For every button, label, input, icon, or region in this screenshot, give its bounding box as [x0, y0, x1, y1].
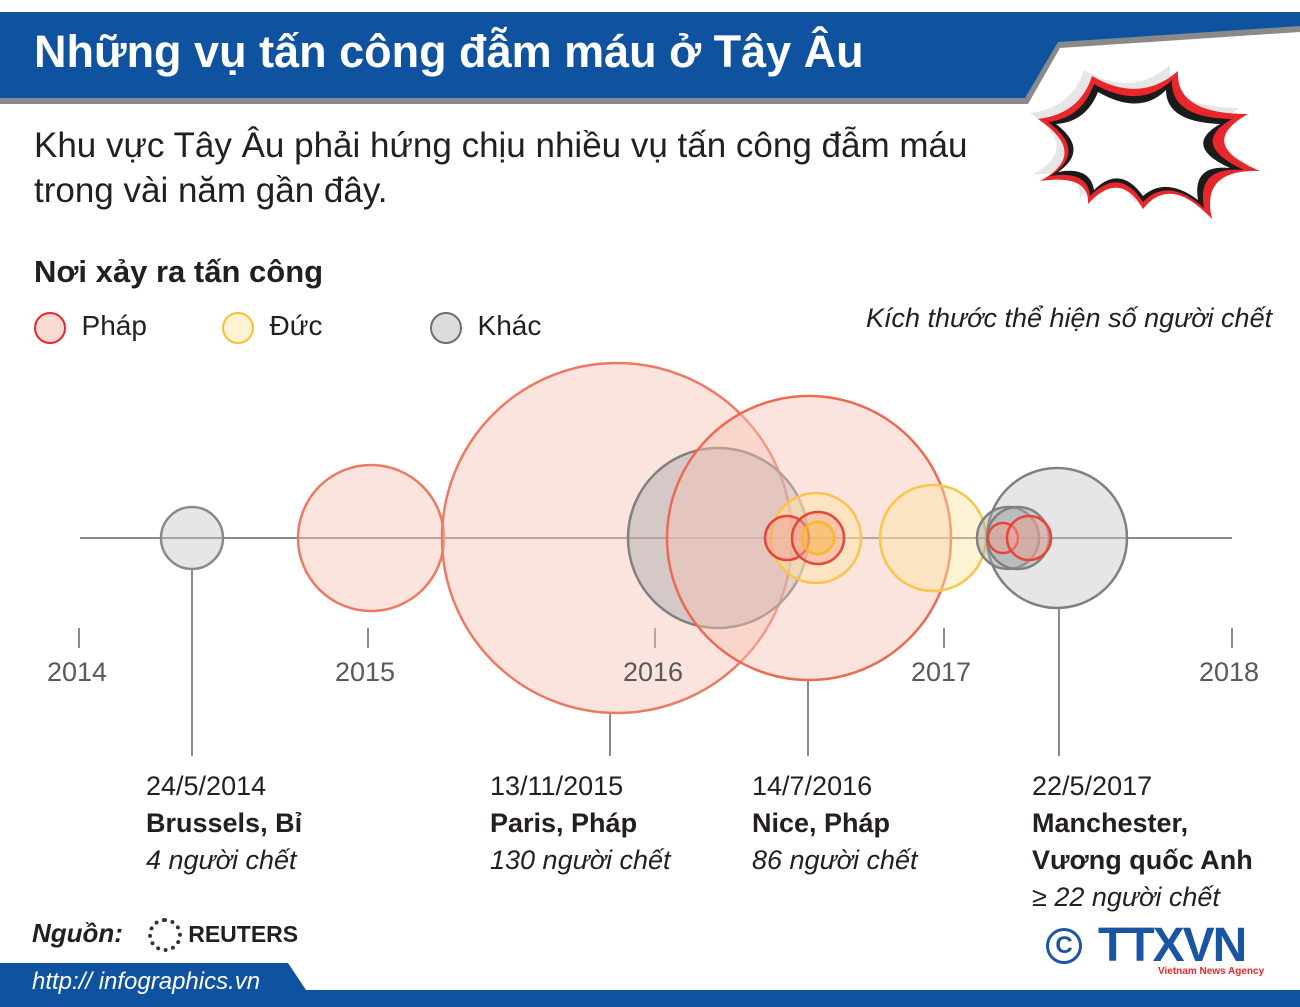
event: Nice: Nice, Pháp [752, 808, 890, 838]
subtitle text [34, 126, 967, 210]
event: Brussels: Brussels, Bỉ [146, 808, 302, 838]
section heading: Nơi xảy ra tấn công [34, 254, 323, 289]
event: Manchester: 22/5/2017 [1032, 771, 1152, 801]
logo: TTXVN: TTXVN [1098, 919, 1245, 972]
footer url: http:// infographics.vn [32, 968, 260, 995]
title: Những vụ tấn công đẫm máu ở Tây Âu [34, 26, 864, 77]
event: Brussels: 4 người chết [146, 845, 297, 875]
bubble timeline chart: 2015 [335, 657, 395, 687]
logo: TTXVN: C [1055, 932, 1073, 959]
event: Nice [752, 771, 918, 875]
event: Manchester [1032, 771, 1253, 912]
event: Paris: 13/11/2015 [490, 771, 623, 801]
event: Brussels: 24/5/2014 [146, 771, 266, 801]
legend: Đức [222, 310, 323, 344]
subtitle text: trong vài năm gần đây. [34, 171, 387, 210]
icon: explosion [1030, 65, 1260, 219]
event: Nice: 14/7/2016 [752, 771, 872, 801]
subtitle text: Khu vực Tây Âu phải hứng chịu nhiều vụ tấn công đẫm máu [34, 126, 967, 165]
legend: Pháp: Pháp [82, 310, 147, 341]
legend: Khác: Khác [478, 310, 541, 341]
source: Nguồn: REUTERS [32, 918, 298, 948]
logo: TTXVN [1046, 919, 1264, 977]
header banner [0, 12, 1300, 104]
legend [34, 310, 541, 344]
bubble timeline chart: 2017 [911, 657, 971, 687]
event: Paris: Paris, Pháp [490, 808, 637, 838]
event: Brussels [146, 771, 302, 875]
event: Manchester: ≥ 22 người chết [1032, 882, 1220, 912]
legend: Khác [430, 310, 541, 344]
bubble timeline chart: 2014 [47, 657, 107, 687]
event: Manchester: Manchester, [1032, 808, 1188, 838]
bubble timeline chart: 2018 [1199, 657, 1259, 687]
footer bar [0, 963, 1300, 1007]
event: Manchester: Vương quốc Anh [1032, 845, 1253, 875]
logo: TTXVN: Vietnam News Agency [1158, 966, 1264, 977]
event: Paris: 130 người chết [490, 845, 671, 875]
legend: Đức: Đức [270, 310, 323, 341]
legend: Pháp [34, 310, 147, 344]
event: Nice: 86 người chết [752, 845, 918, 875]
bubble timeline chart: 2016 [623, 657, 683, 687]
event: Paris [490, 771, 672, 875]
size note: Kích thước thể hiện số người chết [866, 303, 1272, 333]
